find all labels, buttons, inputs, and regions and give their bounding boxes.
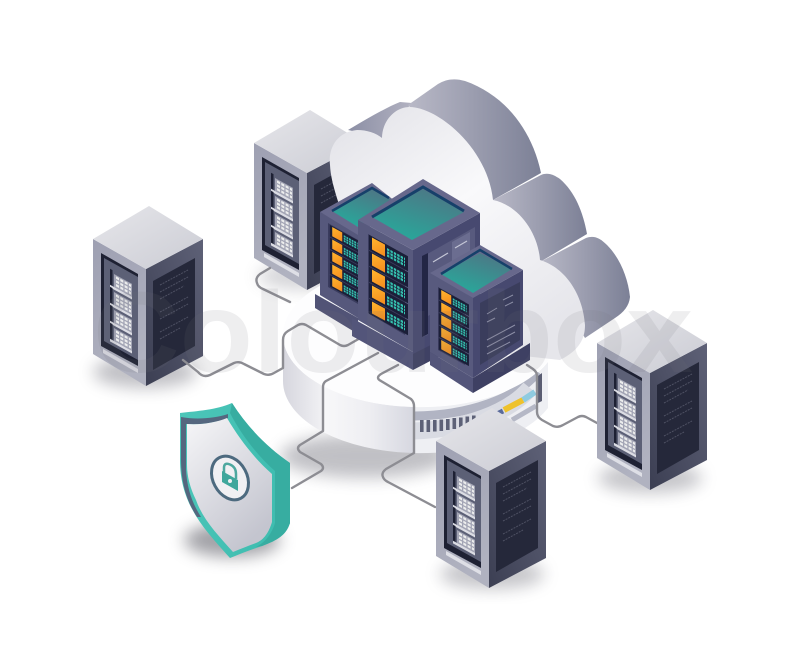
wire: back server to platform [256,268,290,302]
shield [180,403,290,558]
wires [183,268,597,507]
platform side slab [538,373,542,403]
platform: round base [283,263,557,453]
server: left [93,206,203,386]
central server: right [430,245,530,393]
shield dark inner edge [181,414,228,517]
central server: middle [352,179,480,370]
cloud back small lobe [348,102,412,138]
platform top surface [283,263,557,407]
cloud back middle lobe [493,174,587,262]
watermark: Colourbox [93,269,693,397]
wire: shield to platform [292,353,378,488]
central server: left [315,183,400,334]
shield teal body [180,403,290,558]
server: back top [254,110,364,290]
wire: front server to platform [378,365,435,507]
central server group [315,179,530,393]
platform left wall [283,335,323,432]
wire: right server to platform [527,365,597,427]
platform led light [504,400,523,410]
cloud [330,79,630,360]
shield side shade [230,403,290,547]
server: right [597,310,707,490]
platform base ring [414,362,548,453]
shield face [187,418,272,552]
cloud back lower lobe [540,237,630,338]
shadows [93,262,702,589]
icon: padlock badge [204,450,256,506]
cloud front [330,107,585,360]
server: front bottom [436,408,546,588]
wire: left server to platform [183,324,362,376]
cloud back big lobe [408,79,541,200]
platform vents [420,416,476,432]
platform recess band [414,372,538,416]
platform front wall [323,386,414,453]
